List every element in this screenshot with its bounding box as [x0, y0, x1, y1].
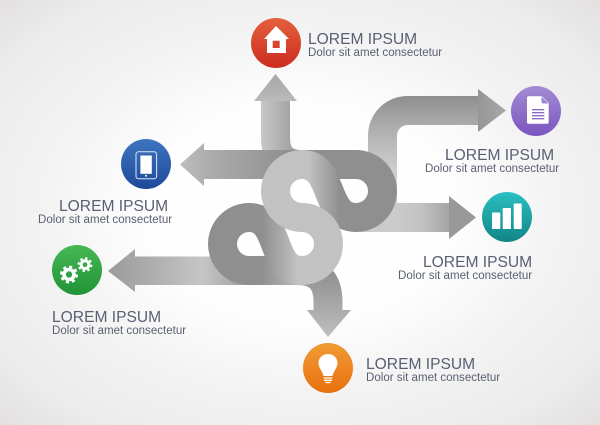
text: bar chart: [398, 254, 532, 282]
knot: upper light band: [276, 164, 356, 218]
text: bar chart: Dolor sit amet consectetur: [398, 270, 532, 282]
icon: document: [511, 86, 561, 136]
text: tablet: [38, 198, 172, 226]
text: gears: Dolor sit amet consectetur: [52, 325, 186, 337]
icon: gears: [52, 245, 102, 295]
arrow: left to tablet with upper right loop: [180, 143, 382, 218]
arrow: right to chart: [360, 196, 476, 239]
text: gears: [52, 309, 186, 337]
text: tablet: Dolor sit amet consectetur: [38, 214, 172, 226]
text: home: [308, 31, 442, 59]
arrow: left to gears with lower left loop: [108, 218, 304, 292]
text: bar chart: LOREM IPSUM: [423, 254, 532, 271]
arrow: down to bulb: [298, 270, 351, 337]
arrow: up to home: [254, 74, 302, 164]
text: light bulb: [366, 356, 500, 384]
text: light bulb: LOREM IPSUM: [366, 356, 475, 373]
text: home: LOREM IPSUM: [308, 31, 417, 48]
arrow: upper right to document: [382, 89, 506, 204]
knot: lower light band: [302, 218, 328, 270]
text: tablet: LOREM IPSUM: [59, 198, 168, 215]
text: home: Dolor sit amet consectetur: [308, 47, 442, 59]
text: document: [425, 147, 559, 175]
text: light bulb: Dolor sit amet consectetur: [366, 372, 500, 384]
text: document: LOREM IPSUM: [445, 147, 554, 164]
icon: home: [251, 18, 301, 68]
text: gears: LOREM IPSUM: [52, 309, 161, 326]
text: document: Dolor sit amet consectetur: [425, 163, 559, 175]
icon: tablet: [121, 139, 171, 189]
icon: light bulb: [303, 343, 353, 393]
icon: bar chart: [482, 192, 532, 242]
